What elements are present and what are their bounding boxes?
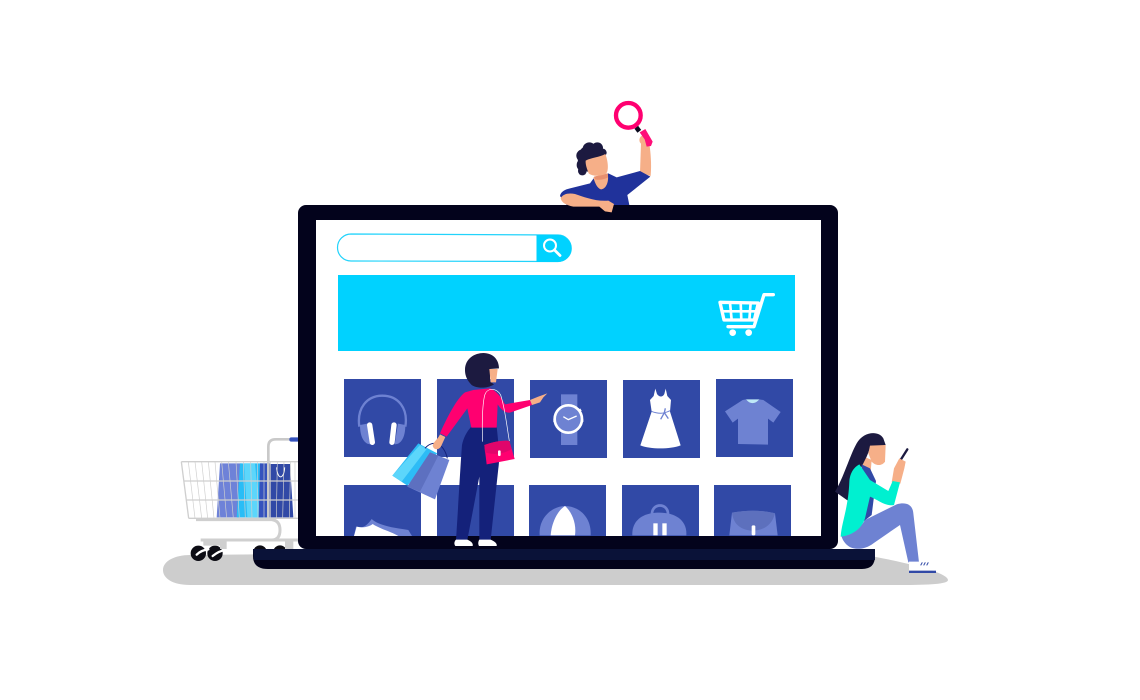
hair <box>465 353 499 388</box>
product tile: shorts <box>714 485 791 536</box>
woman pointing at products <box>392 353 547 546</box>
phone <box>901 449 907 459</box>
icon: magnifier <box>544 240 560 256</box>
raised arm <box>640 143 651 176</box>
forearm <box>892 458 906 484</box>
inner top <box>862 464 876 522</box>
pointing hand <box>530 393 547 405</box>
man with magnifying glass <box>560 103 653 212</box>
laptop base <box>253 549 875 569</box>
laptop screen <box>316 220 821 536</box>
shoe <box>909 562 936 573</box>
banner <box>338 275 795 351</box>
search bar <box>338 234 572 262</box>
sweater <box>440 388 532 437</box>
product tile: hidden item <box>437 379 514 457</box>
face <box>489 369 498 382</box>
shirt <box>560 171 650 205</box>
magnifying glass <box>616 103 653 147</box>
product tile: watch <box>530 380 607 458</box>
shopping bags <box>392 443 449 499</box>
face <box>868 445 886 465</box>
cart handle <box>268 439 291 518</box>
product tile: headphones <box>344 379 421 457</box>
purse strap <box>482 389 509 442</box>
cart bags <box>217 463 293 517</box>
product tile: cap <box>529 485 606 536</box>
pants <box>841 503 919 562</box>
product tile: dress <box>623 380 700 458</box>
laptop frame <box>298 205 838 549</box>
hair <box>576 142 607 175</box>
pants <box>456 427 499 540</box>
neck <box>593 173 608 189</box>
resting arm <box>561 194 614 212</box>
product tile: t-shirt <box>716 379 793 457</box>
cart chassis <box>196 520 280 540</box>
left hand <box>433 434 445 449</box>
shopping cart <box>181 437 300 561</box>
product tile: handbag <box>622 485 699 536</box>
shoes <box>454 540 497 546</box>
search button <box>536 235 572 262</box>
cart wheels <box>191 545 287 561</box>
cart legs <box>203 541 293 549</box>
product tile: hidden item two <box>437 485 514 536</box>
head <box>586 154 608 176</box>
icon: banner cart <box>720 295 773 336</box>
cart basket <box>181 462 298 518</box>
neck <box>861 457 872 472</box>
product tile: shoe <box>344 485 421 536</box>
ground shadow <box>163 549 948 585</box>
purse <box>484 441 515 464</box>
hair <box>835 433 886 501</box>
woman sitting with phone <box>835 433 936 573</box>
sweater <box>841 464 900 537</box>
